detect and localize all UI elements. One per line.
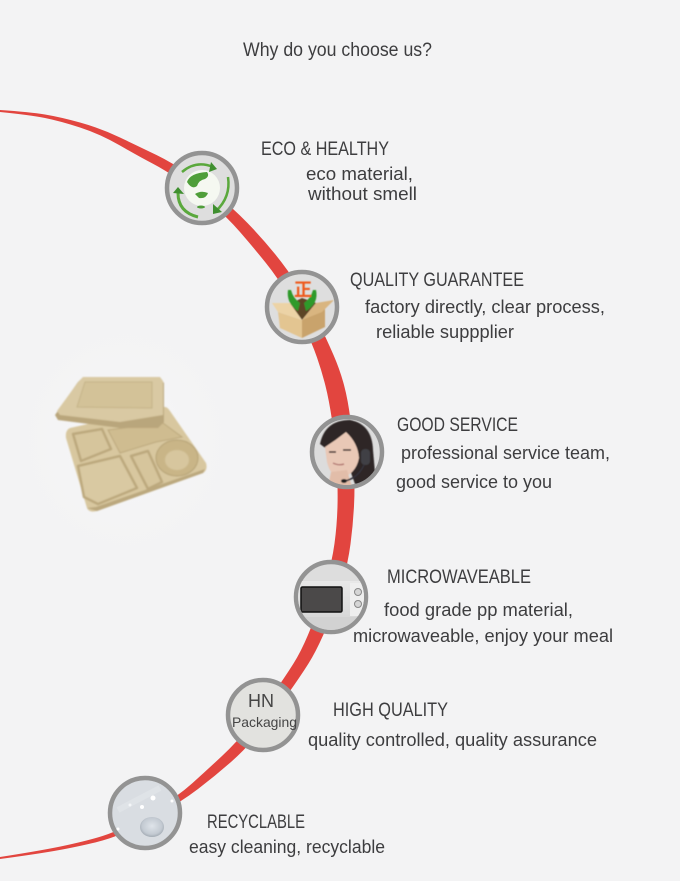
- logo text: [232, 691, 297, 730]
- tray compartment: bottom left: [78, 456, 137, 504]
- tray compartment: top left: [73, 429, 111, 461]
- text: good service: GOOD SERVICE: [397, 415, 518, 436]
- text: eco and healthy: without smell: [307, 184, 417, 204]
- icon: customer service agent portrait: [320, 420, 376, 487]
- icon: microwave oven: [296, 581, 366, 630]
- node 2: quality guarantee: [267, 272, 337, 342]
- text: eco and healthy: eco material,: [306, 164, 413, 184]
- text: high quality: HIGH QUALITY: [333, 700, 448, 721]
- title: Why do you choose us?: [243, 40, 432, 61]
- text: eco and healthy: [261, 139, 417, 204]
- text: high quality: [308, 700, 597, 750]
- logo text: Packaging: [232, 714, 297, 730]
- text: microwaveable: [353, 567, 613, 646]
- tray compartment: long middle: [131, 451, 162, 489]
- text: good service: [396, 415, 610, 492]
- red curved timeline arc: [0, 110, 354, 859]
- tray base: [66, 407, 207, 512]
- text: quality guarantee: reliable suppplier: [376, 322, 514, 342]
- node 1: eco and healthy: [167, 153, 237, 223]
- node 4: microwaveable: [296, 562, 366, 632]
- text: eco and healthy: ECO & HEALTHY: [261, 139, 389, 160]
- text: good service: good service to you: [396, 472, 552, 492]
- text: quality guarantee: factory directly, clear process,: [365, 297, 605, 317]
- tray compartment: round bowl: [156, 440, 198, 476]
- node 5: HN Packaging: [228, 680, 298, 750]
- text: recyclable: easy cleaning, recyclable: [189, 837, 385, 857]
- tray compartment: top main: [108, 423, 182, 453]
- icon: globe with green arrows: [173, 162, 228, 217]
- text: quality guarantee: QUALITY GUARANTEE: [350, 270, 524, 291]
- text: good service: professional service team,: [401, 443, 610, 463]
- text: quality guarantee: [350, 270, 605, 342]
- node 6: recyclable: [110, 778, 180, 848]
- text: recyclable: RECYCLABLE: [207, 812, 305, 833]
- text: microwaveable: food grade pp material,: [384, 600, 573, 620]
- text: microwaveable: MICROWAVEABLE: [387, 567, 531, 588]
- icon: orange character mark: 正: [294, 276, 312, 302]
- text: microwaveable: microwaveable, enjoy your meal: [353, 626, 613, 646]
- icon: water droplets: [116, 788, 174, 837]
- node 3: good service: [312, 417, 382, 487]
- text: high quality: quality controlled, quality assurance: [308, 730, 597, 750]
- product photo: bagasse tray with lid: [55, 377, 207, 512]
- tray lid: [55, 378, 164, 428]
- text: recyclable: [189, 812, 385, 857]
- logo text: HN: [248, 691, 274, 711]
